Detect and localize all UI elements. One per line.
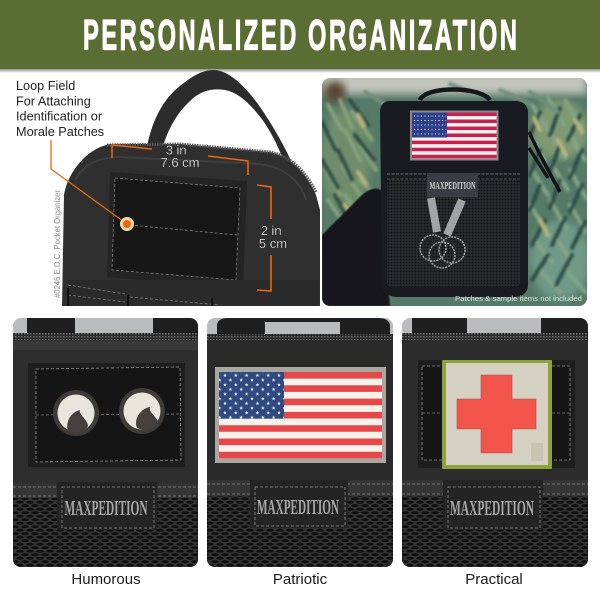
pouch body	[402, 318, 588, 567]
blurred foliage	[319, 72, 590, 306]
dimension bracket: height	[257, 185, 271, 291]
pouch body	[207, 318, 393, 567]
brand label: MAXPEDITION	[64, 496, 148, 520]
callout text: loop field: Identification or	[16, 110, 103, 124]
panel: humorous	[13, 318, 198, 567]
callout text: loop field: Loop Field	[16, 79, 75, 93]
bag body	[62, 144, 320, 307]
lower pocket strip	[233, 280, 236, 281]
bag	[380, 101, 528, 297]
panel: loop field closeup	[62, 70, 320, 307]
icon: googly eye left	[53, 390, 99, 436]
pocket and mesh	[402, 480, 588, 567]
velcro field	[28, 363, 185, 467]
callout text: loop field: For Attaching	[16, 94, 91, 108]
panel: patriotic	[207, 318, 393, 567]
panel: photo of bag in hand	[319, 72, 590, 306]
icon: googly eye right	[119, 388, 165, 434]
photo brand label: MAXPEDITION	[430, 181, 476, 192]
zipper pull	[529, 132, 560, 192]
caption: practical: Practical	[465, 571, 523, 588]
brand label: MAXPEDITION	[257, 495, 339, 519]
contents seen through mesh	[420, 198, 465, 268]
velcro loop field	[107, 172, 247, 290]
dimension bracket: width	[112, 145, 248, 175]
vertical product label: #0246 E.D.C. Pocket Organizer	[53, 190, 62, 298]
brand label	[443, 480, 543, 530]
panel: practical	[402, 318, 588, 567]
header band	[0, 0, 600, 73]
first aid patch	[442, 360, 552, 469]
mesh pocket	[387, 180, 520, 287]
photo caption: Patches & sample items not included	[455, 294, 582, 303]
brand label	[57, 482, 157, 530]
photo brand label	[427, 173, 478, 197]
photo flag patch	[410, 110, 498, 160]
handle	[420, 90, 490, 100]
icon: bag handle	[148, 70, 292, 162]
dimension text: width: 7.6 cm	[160, 155, 200, 170]
leader line	[51, 140, 127, 224]
flag patch	[215, 367, 386, 463]
dimension text: height: 5 cm	[259, 236, 287, 251]
pocket and mesh	[207, 480, 393, 567]
dimension text: height: 2 in	[261, 223, 282, 238]
title: PERSONALIZED ORGANIZATION	[83, 12, 517, 59]
glove	[322, 189, 390, 306]
brand label: MAXPEDITION	[450, 496, 534, 520]
pocket and mesh	[13, 484, 198, 567]
caption: patriotic: Patriotic	[273, 571, 328, 588]
caption: humorous: Humorous	[71, 571, 141, 588]
velcro field	[418, 360, 575, 468]
dimension text: width: 3 in	[166, 142, 187, 158]
callout text: loop field: Morale Patches	[16, 125, 104, 139]
marker dot	[120, 217, 134, 231]
pouch body	[13, 318, 198, 567]
brand label	[250, 480, 348, 528]
